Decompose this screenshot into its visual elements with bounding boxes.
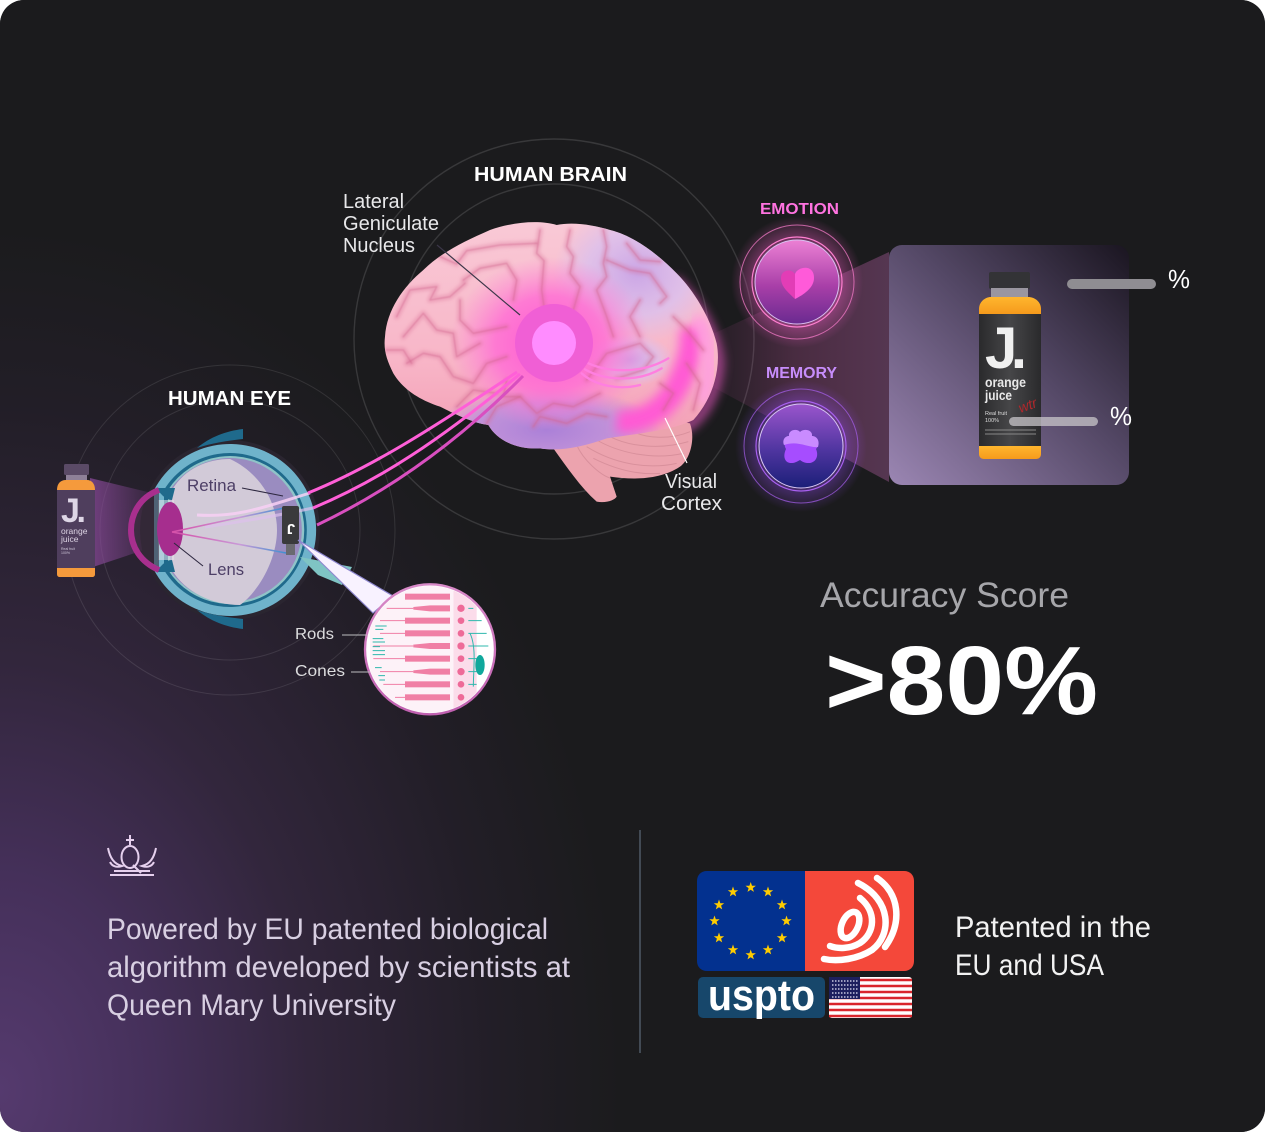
memory score percent: % bbox=[1110, 401, 1132, 431]
icon: US flag bbox=[829, 977, 912, 1018]
leader line: cones bbox=[351, 671, 370, 673]
leader line: rods bbox=[342, 634, 367, 636]
label: retina: Retina bbox=[187, 477, 237, 495]
lateral geniculate nucleus marker bbox=[515, 304, 593, 382]
heading: human eye: HUMAN EYE bbox=[168, 388, 291, 410]
panel: human brain bbox=[343, 164, 722, 515]
label: lens: Lens bbox=[208, 561, 244, 579]
emotion score percent: % bbox=[1168, 264, 1190, 294]
small juice bottle: orange bbox=[61, 526, 88, 536]
panel: product card bbox=[889, 245, 1190, 485]
text: patented in the EU and USA: EU and USA bbox=[955, 949, 1104, 982]
card background bbox=[889, 245, 1129, 485]
emotion circle with heart icon bbox=[731, 216, 863, 348]
zoom wedge bbox=[298, 540, 393, 613]
panel: human eye bbox=[57, 372, 523, 717]
optic nerve fibres to brain bbox=[308, 372, 523, 525]
small juice bottle: J. bbox=[61, 492, 86, 530]
small juice bottle: Real fruit bbox=[61, 547, 75, 551]
icon: EU flag bbox=[697, 871, 805, 971]
label: lateral geniculate nucleus: Lateral bbox=[343, 191, 404, 213]
leader line: visual cortex bbox=[665, 418, 687, 463]
emotion score bar bbox=[1067, 279, 1156, 289]
icon: European Patent Office mark bbox=[805, 871, 914, 971]
juice bottle: 100% bbox=[985, 418, 999, 424]
accuracy value: >80% bbox=[825, 626, 1098, 735]
label: rods: Rods bbox=[295, 626, 334, 643]
leader line: lateral geniculate nucleus bbox=[437, 245, 520, 315]
inverted bottle image on retina: J bbox=[287, 520, 295, 537]
brain illustration bbox=[385, 203, 720, 502]
small juice bottle bbox=[57, 464, 95, 577]
memory score bar bbox=[1009, 417, 1098, 426]
light wedge from brain to product card bbox=[700, 252, 889, 482]
light cone from bottle to eye bbox=[90, 478, 156, 568]
eye cross-section bbox=[131, 429, 320, 629]
label: cones: Cones bbox=[295, 663, 345, 680]
label: emotion: EMOTION bbox=[760, 201, 839, 218]
emotion block bbox=[731, 201, 863, 348]
small juice bottle: 100% bbox=[61, 551, 70, 555]
small juice bottle: juice bbox=[60, 534, 79, 544]
logo: uspto: uspto bbox=[708, 971, 815, 1020]
label: lateral geniculate nucleus: Nucleus bbox=[343, 235, 415, 257]
juice bottle: juice bbox=[984, 387, 1012, 403]
juice bottle: J. bbox=[985, 316, 1027, 381]
juice bottle: Real fruit bbox=[985, 411, 1007, 417]
icon: Queen Mary crown bbox=[108, 835, 156, 875]
magnified retina: rods and cones bbox=[365, 583, 495, 717]
inverted bottle image on retina bbox=[282, 506, 299, 555]
eye concentric rings bbox=[65, 365, 395, 695]
text: powered by EU patent: Queen Mary University bbox=[107, 989, 396, 1022]
vertical divider bbox=[639, 830, 641, 1053]
heading: human brain: HUMAN BRAIN bbox=[474, 164, 627, 186]
text: powered by EU patent: Powered by EU patented biological bbox=[107, 913, 548, 946]
accuracy score bbox=[820, 576, 1098, 735]
memory block bbox=[735, 365, 867, 512]
juice bottle: orange bbox=[985, 374, 1026, 390]
accuracy heading: Accuracy Score bbox=[820, 576, 1069, 615]
memory circle with brain icon bbox=[735, 380, 867, 512]
label: visual cortex: Visual bbox=[665, 471, 717, 493]
brain concentric rings bbox=[354, 139, 754, 539]
juice bottle: wtr bbox=[1016, 394, 1040, 416]
juice bottle bbox=[979, 272, 1041, 459]
patent logos bbox=[697, 871, 914, 1020]
label: visual cortex: Cortex bbox=[661, 493, 722, 515]
text: powered by EU patent: algorithm developed by scientists at bbox=[107, 951, 571, 984]
label: memory: MEMORY bbox=[766, 365, 837, 382]
label: lateral geniculate nucleus: Geniculate bbox=[343, 213, 439, 235]
optic nerve stub bbox=[300, 557, 352, 585]
leader line: retina bbox=[242, 488, 283, 496]
leader line: lens bbox=[174, 543, 203, 566]
text: patented in the EU and USA: Patented in the bbox=[955, 911, 1151, 944]
